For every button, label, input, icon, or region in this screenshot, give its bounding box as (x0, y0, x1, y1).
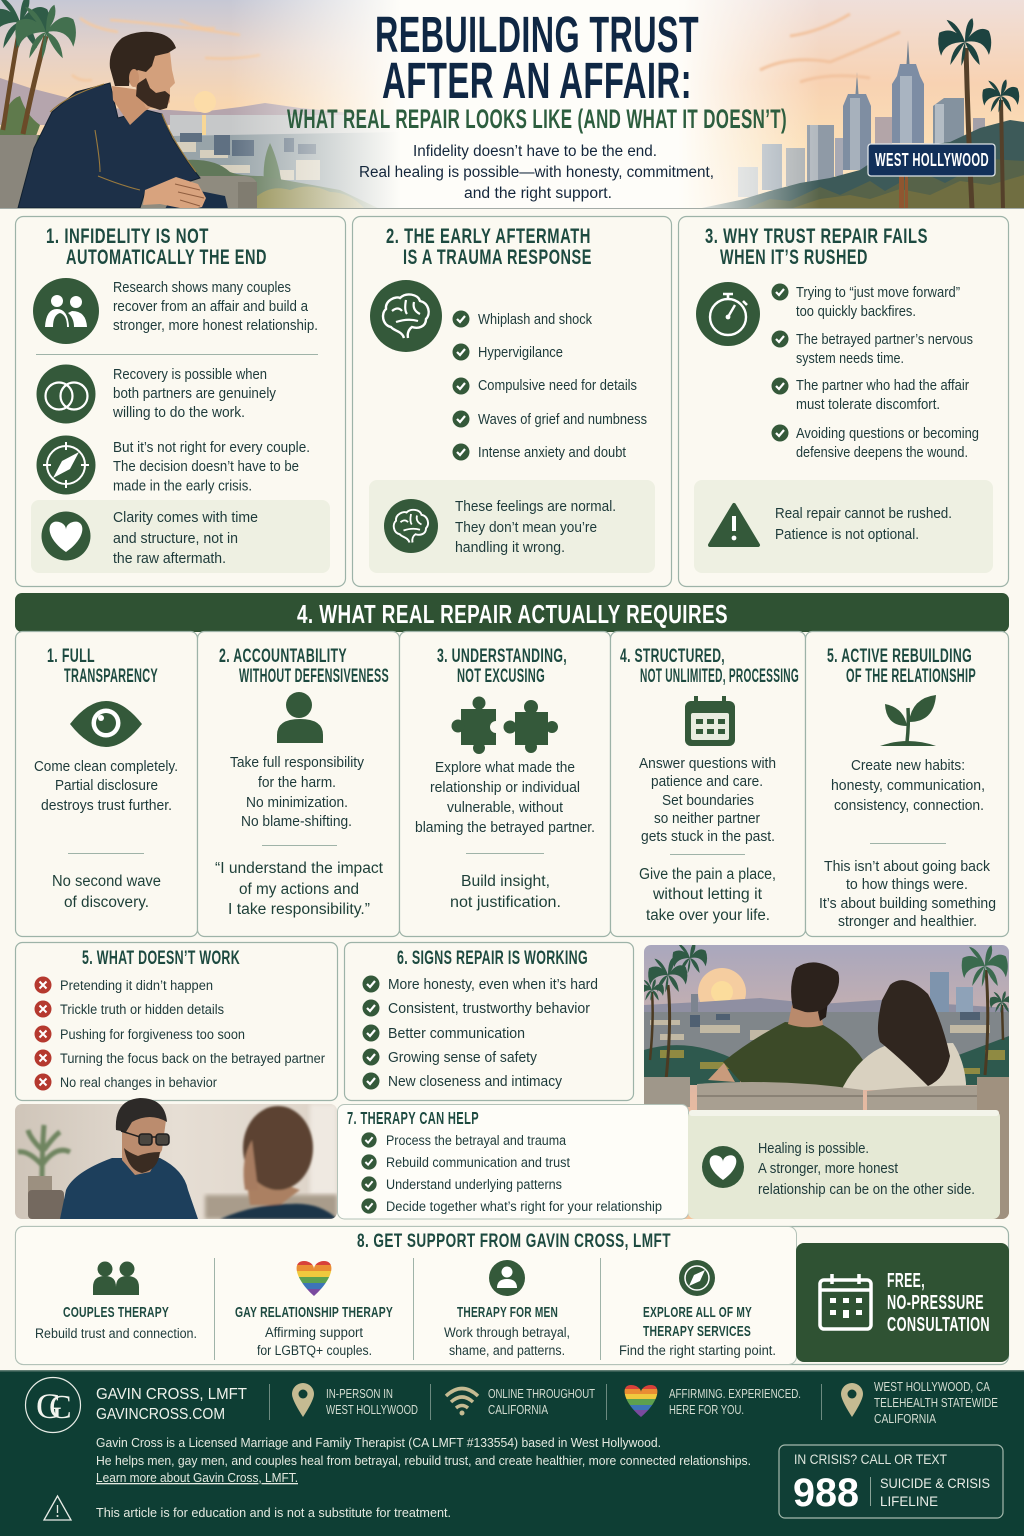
text: Partial disclosure (55, 778, 158, 794)
disclaimer: This article is for education and is not a substitute for treatment. (96, 1505, 451, 1520)
text: research: Research shows many couples (113, 280, 291, 296)
text: honesty, communication, (831, 778, 985, 794)
heading: 1. FULL (47, 646, 95, 667)
list: signs: More honesty, even when it’s hard (388, 977, 598, 993)
icon: sprout (880, 695, 936, 746)
list: what doesn't work: Turning the focus back on the betrayed partner (60, 1051, 325, 1066)
card 2: accountability (198, 632, 400, 936)
heading (827, 646, 976, 687)
service: explore all services (619, 1260, 776, 1358)
card 3: understanding (400, 632, 610, 936)
service: explore all services: THERAPY SERVICES (643, 1323, 751, 1340)
list: what doesn't work: Pushing for forgiveness too soon (60, 1027, 245, 1042)
text: recovery: willing to do the work. (112, 405, 245, 421)
header banner (0, 0, 1024, 210)
heading: AUTOMATICALLY THE END (66, 246, 267, 269)
checklist: why it fails: defensive deepens the wound. (796, 445, 968, 461)
checklist: trauma symptoms (452, 310, 647, 461)
list: signs: Growing sense of safety (388, 1050, 538, 1066)
takeaway: This isn’t about going back (824, 859, 991, 875)
service: gay relationship therapy: Affirming support (265, 1325, 363, 1340)
text: consistency, connection. (834, 798, 984, 814)
card 1: full transparency (16, 632, 198, 936)
heading: 3. UNDERSTANDING, (437, 646, 567, 667)
panel 6: signs repair is working (344, 942, 634, 1100)
checklist: trauma symptoms: Hypervigilance (478, 345, 563, 361)
about paragraph (96, 1435, 751, 1485)
heading: 4. STRUCTURED, (620, 646, 725, 667)
callout: clarity: and structure, not in (113, 531, 238, 547)
in-person location (292, 1383, 418, 1417)
about paragraph: Learn more about Gavin Cross, LMFT. (96, 1470, 298, 1485)
affirming (624, 1385, 800, 1417)
section banner 4: 4. WHAT REAL REPAIR ACTUALLY REQUIRES (297, 599, 728, 629)
list: how therapy helps: Process the betrayal and trauma (386, 1133, 566, 1148)
checklist: why it fails: must tolerate discomfort. (796, 397, 940, 413)
sign: West Hollywood (868, 144, 995, 176)
callout: healing is possible: Healing is possible. (758, 1141, 869, 1157)
panel 7: therapy can help (338, 1104, 688, 1219)
takeaway: of discovery. (64, 894, 149, 911)
quote: “I understand the impact (215, 860, 384, 877)
text: blaming the betrayed partner. (415, 820, 595, 836)
text (34, 759, 178, 814)
service: couples therapy: Rebuild trust and connection. (35, 1326, 197, 1341)
logo (26, 1378, 80, 1432)
heading: NOT UNLIMITED, PROCESSING (640, 666, 799, 687)
takeaway: not justification. (450, 894, 561, 911)
text: Set boundaries (662, 793, 754, 809)
card 4: structured processing (610, 632, 806, 936)
footer (0, 1370, 1024, 1536)
service: therapy for men: THERAPY FOR MEN (457, 1304, 558, 1321)
crisis box (779, 1445, 1003, 1518)
about paragraph: Gavin Cross is a Licensed Marriage and Family Therapist (CA LMFT #133554) based in West Hollywood. (96, 1435, 661, 1450)
heading (219, 646, 389, 687)
quote: of my actions and (239, 881, 359, 898)
panel 3: why trust repair fails (678, 216, 1008, 586)
text: No blame-shifting. (241, 814, 352, 830)
icon: compass (36, 436, 96, 494)
service area (841, 1380, 998, 1426)
text: recovery: both partners are genuinely (113, 386, 277, 402)
text: vulnerable, without (447, 800, 563, 816)
text (415, 760, 595, 836)
crisis box: 988 (793, 1471, 859, 1515)
heading: 2. THE EARLY AFTERMATH (386, 225, 591, 248)
service: gay relationship therapy (235, 1258, 393, 1358)
heading: IS A TRAUMA RESPONSE (403, 246, 592, 269)
callout: feelings are normal: handling it wrong. (455, 540, 565, 556)
checklist: why it fails: The partner who had the affair (796, 378, 969, 394)
heading: 8. GET SUPPORT FROM GAVIN CROSS, LMFT (357, 1231, 671, 1252)
man in navy shirt (18, 32, 228, 210)
service: explore all services: EXPLORE ALL OF MY (643, 1304, 752, 1321)
service: explore all services: Find the right starting point. (619, 1343, 776, 1358)
text: Come clean completely. (34, 759, 178, 775)
checklist: trauma symptoms: Intense anxiety and doubt (478, 445, 626, 461)
couch (0, 135, 257, 209)
service: therapy for men: Work through betrayal, (444, 1325, 570, 1340)
intro text: Infidelity doesn’t have to be the end. (413, 143, 657, 160)
heading (47, 646, 158, 687)
panel 1: infidelity is not the end (16, 216, 346, 586)
text: gets stuck in the past. (641, 829, 775, 845)
text: recovery (112, 367, 277, 421)
service: therapy for men: shame, and patterns. (449, 1343, 565, 1358)
quote (215, 860, 384, 918)
text: Explore what made the (435, 760, 575, 776)
heading (386, 225, 592, 269)
text: research (113, 280, 318, 334)
icon: calendar (820, 1274, 871, 1329)
text: not right for every couple: But it’s not right for every couple. (113, 440, 310, 456)
checklist: trauma symptoms: Compulsive need for details (478, 378, 637, 394)
contact name and site: GAVIN CROSS, LMFT (96, 1386, 248, 1403)
icon: rings (36, 364, 96, 424)
checklist: why it fails: Trying to “just move forward” (796, 285, 960, 301)
callout: clarity: the raw aftermath. (113, 551, 226, 567)
callout: feelings are normal (369, 480, 655, 573)
takeaway: to how things were. (846, 877, 968, 893)
heading (705, 225, 928, 269)
checklist: trauma symptoms: Waves of grief and numbness (478, 412, 647, 428)
takeaway (450, 873, 561, 911)
checklist: why it fails (772, 284, 979, 461)
scene: left landscape (0, 18, 400, 209)
text (230, 755, 365, 830)
contact name and site: GAVINCROSS.COM (96, 1406, 225, 1423)
section banner 4 (15, 593, 1009, 632)
online availability: CALIFORNIA (488, 1403, 549, 1417)
icon: warning (44, 1496, 71, 1520)
callout: clarity (31, 500, 330, 573)
heading: 2. ACCOUNTABILITY (219, 646, 347, 667)
takeaway: stronger and healthier. (838, 914, 977, 930)
quote: I take responsibility.” (228, 901, 370, 918)
text: so neither partner (654, 811, 760, 827)
text (639, 756, 776, 845)
card 5: active rebuilding (806, 632, 1008, 936)
in-person location: WEST HOLLYWOOD (326, 1403, 418, 1417)
takeaway: take over your life. (646, 907, 770, 924)
text: not right for every couple: made in the early crisis. (113, 478, 252, 494)
text: not right for every couple (113, 440, 310, 494)
clouds: right sky (760, 14, 900, 82)
title: REBUILDING TRUST (375, 6, 699, 63)
heading (437, 646, 567, 687)
callout: cannot be rushed: Real repair cannot be rushed. (775, 506, 952, 522)
list: what doesn't work (34, 976, 325, 1090)
checklist: why it fails: The betrayed partner’s nervous (796, 332, 973, 348)
heading: 7. THERAPY CAN HELP (347, 1108, 479, 1128)
heading: WITHOUT DEFENSIVENESS (239, 666, 389, 687)
list: signs (362, 976, 598, 1090)
icon: calendar (685, 696, 735, 746)
takeaway (819, 859, 996, 930)
heading: 3. WHY TRUST REPAIR FAILS (705, 225, 928, 248)
crisis box: LIFELINE (880, 1493, 938, 1509)
text (831, 758, 985, 814)
affirming: AFFIRMING. EXPERIENCED. (669, 1387, 801, 1401)
list: signs: Consistent, trustworthy behavior (388, 1001, 590, 1017)
icon: puzzle (452, 696, 558, 754)
heading: 6. SIGNS REPAIR IS WORKING (397, 948, 588, 969)
intro text (359, 143, 714, 202)
list: how therapy helps (361, 1132, 662, 1214)
text (887, 1270, 990, 1336)
callout: clarity: Clarity comes with time (113, 510, 258, 526)
panel 2: early aftermath (352, 216, 672, 586)
list: signs: Better communication (388, 1026, 525, 1042)
callout: feelings are normal: They don’t mean you’re (455, 520, 597, 536)
takeaway: without letting it (652, 886, 763, 903)
checklist: why it fails: system needs time. (796, 351, 904, 367)
service: gay relationship therapy: for LGBTQ+ couples. (257, 1343, 372, 1358)
heading: NOT EXCUSING (457, 666, 545, 687)
in-person location: IN-PERSON IN (326, 1387, 393, 1401)
text: relationship or individual (430, 780, 580, 796)
online availability (446, 1387, 595, 1417)
crisis box: SUICIDE & CRISIS (880, 1475, 990, 1491)
service: gay relationship therapy: GAY RELATIONSHIP THERAPY (235, 1304, 393, 1321)
scene: right skyline (697, 40, 1024, 209)
checklist: trauma symptoms: Whiplash and shock (478, 312, 593, 328)
heading: TRANSPARENCY (64, 666, 158, 687)
heading: 5. WHAT DOESN’T WORK (82, 948, 240, 969)
list: how therapy helps: Rebuild communication and trust (386, 1155, 570, 1170)
text: FREE, (887, 1270, 925, 1292)
icon: couple (33, 278, 99, 344)
list: how therapy helps: Decide together what’s right for your relationship (386, 1199, 662, 1214)
icon: brain (370, 280, 442, 352)
title: AFTER AN AFFAIR: (382, 52, 692, 109)
takeaway: No second wave (52, 873, 161, 890)
service: couples therapy (35, 1262, 197, 1341)
crisis box: IN CRISIS? CALL OR TEXT (794, 1452, 947, 1467)
photo: therapist session (15, 1098, 337, 1219)
icon: eye (70, 701, 142, 747)
title (375, 6, 699, 109)
checklist: why it fails: too quickly backfires. (796, 304, 916, 320)
about paragraph: He helps men, gay men, and couples heal from betrayal, rebuild trust, and create healthier, more connected relationships. (96, 1453, 751, 1468)
call to action: free consultation (796, 1243, 1009, 1362)
service area: CALIFORNIA (874, 1412, 937, 1426)
text: patience and care. (651, 774, 763, 790)
icon: stopwatch (696, 282, 760, 346)
callout: healing is possible: relationship can be on the other side. (758, 1182, 975, 1198)
scene: palm trees (0, 0, 1019, 209)
logo: G (36, 1386, 62, 1426)
panel 5: what doesn't work (16, 942, 338, 1100)
online availability: ONLINE THROUGHOUT (488, 1387, 595, 1401)
list: signs: New closeness and intimacy (388, 1074, 563, 1090)
text: Take full responsibility (230, 755, 365, 771)
icon: person (277, 692, 323, 743)
intro text: Real healing is possible—with honesty, commitment, (359, 164, 714, 181)
service: therapy for men (444, 1260, 570, 1358)
text: not right for every couple: The decision doesn’t have to be (113, 459, 299, 475)
heading: 1. INFIDELITY IS NOT (46, 225, 209, 248)
list: what doesn't work: Pretending it didn’t happen (60, 978, 213, 993)
contact name and site (96, 1386, 248, 1423)
service: couples therapy: COUPLES THERAPY (63, 1304, 169, 1321)
text: Create new habits: (851, 758, 965, 774)
list: how therapy helps: Understand underlying patterns (386, 1177, 562, 1192)
takeaway: Give the pain a place, (639, 866, 776, 883)
service area: TELEHEALTH STATEWIDE (874, 1396, 998, 1410)
logo: C (49, 1389, 72, 1426)
list: what doesn't work: No real changes in behavior (60, 1075, 217, 1090)
text: No minimization. (246, 795, 348, 811)
text: destroys trust further. (41, 798, 172, 814)
takeaway: It’s about building something (819, 896, 996, 912)
heading (46, 225, 267, 269)
text: Answer questions with (639, 756, 776, 772)
list: what doesn't work: Trickle truth or hidden details (60, 1002, 224, 1017)
heading (620, 646, 799, 687)
central fade (230, 0, 820, 209)
callout: cannot be rushed: Patience is not optional. (775, 527, 919, 543)
checklist: why it fails: Avoiding questions or becoming (796, 426, 979, 442)
service area: WEST HOLLYWOOD, CA (874, 1380, 991, 1394)
heading: WHEN IT’S RUSHED (720, 246, 868, 269)
takeaway (52, 873, 161, 911)
text: recovery: Recovery is possible when (113, 367, 267, 383)
panel 8: get support (16, 1226, 1008, 1364)
callout: feelings are normal: These feelings are normal. (455, 499, 616, 515)
affirming: HERE FOR YOU. (669, 1403, 744, 1417)
takeaway (639, 866, 776, 924)
intro text: and the right support. (464, 185, 612, 202)
takeaway: Build insight, (461, 873, 550, 890)
photo: couple on sofa (640, 942, 1014, 1219)
text: research: recover from an affair and build a (113, 299, 309, 315)
text: for the harm. (258, 775, 336, 791)
callout: cannot be rushed (694, 480, 993, 573)
text: research: stronger, more honest relationship. (113, 318, 318, 334)
callout: healing is possible (688, 1110, 1000, 1219)
callout: healing is possible: A stronger, more honest (758, 1161, 898, 1177)
